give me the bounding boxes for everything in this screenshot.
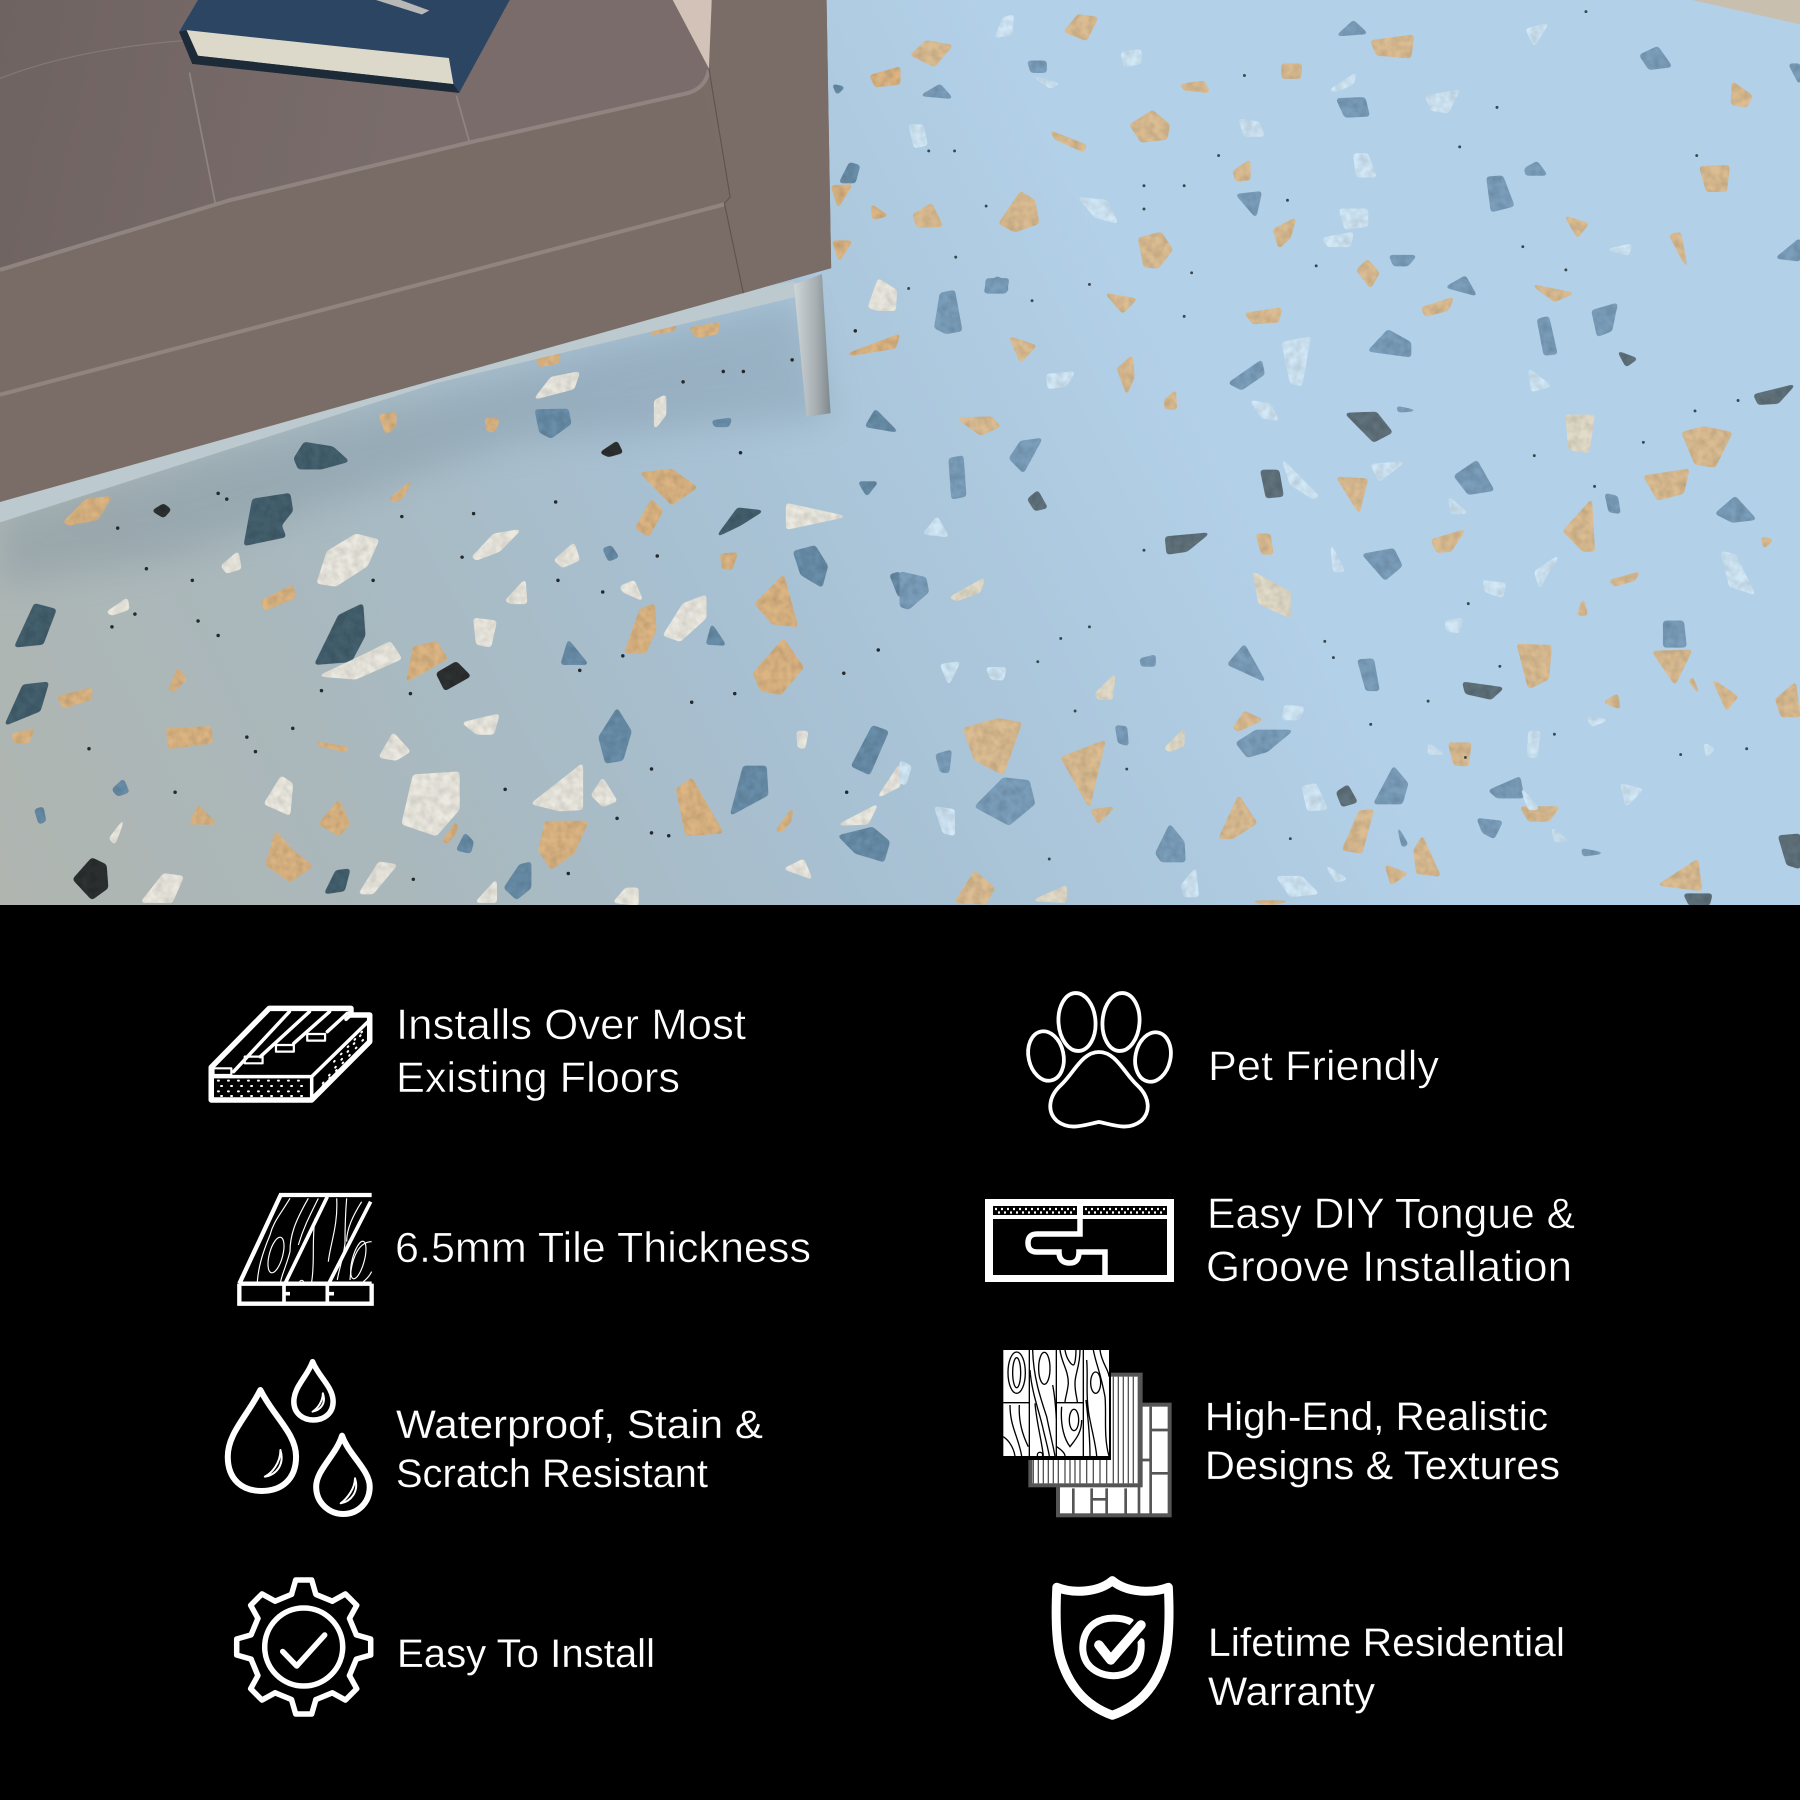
terrazzo chips: right floor xyxy=(900,0,1800,905)
sofa lower front xyxy=(0,0,831,502)
feature: lifetime residential warranty xyxy=(1056,1581,1565,1715)
black features panel xyxy=(0,905,1800,1800)
label xyxy=(396,1403,763,1496)
book xyxy=(179,0,510,93)
terrazzo chips: left floor xyxy=(0,67,900,905)
sofa cushion piping xyxy=(0,70,729,395)
icon: tongue and groove joint xyxy=(985,1199,1174,1282)
sofa leg xyxy=(794,274,831,417)
label xyxy=(1208,1621,1565,1714)
icon: paw print xyxy=(1024,992,1175,1127)
feature: tongue and groove installation xyxy=(985,1190,1575,1291)
label: 6.5mm Tile Thickness xyxy=(395,1224,811,1272)
feature: waterproof, stain and scratch resistant xyxy=(228,1362,763,1514)
label: Groove Installation xyxy=(1206,1243,1572,1291)
pen xyxy=(376,0,429,15)
label: Existing Floors xyxy=(396,1054,680,1102)
label xyxy=(396,1001,746,1102)
label: Scratch Resistant xyxy=(396,1452,708,1496)
icon: water drops xyxy=(228,1362,370,1514)
icon: shield with check xyxy=(1056,1581,1169,1715)
sofa seat seam xyxy=(0,41,184,78)
sofa cushion front xyxy=(0,87,730,395)
label: Designs & Textures xyxy=(1205,1444,1560,1488)
label: Warranty xyxy=(1208,1670,1375,1714)
label xyxy=(1205,1395,1560,1488)
icon: wood plank cross section xyxy=(239,1195,372,1304)
sofa arm seam xyxy=(709,68,743,293)
photo: terrazzo floor with sofa xyxy=(0,0,1800,905)
feature: pet friendly xyxy=(1024,992,1439,1127)
label: Easy To Install xyxy=(397,1632,655,1676)
icon: gear with check xyxy=(236,1579,371,1715)
feature: installs over most existing floors xyxy=(211,1001,746,1102)
label xyxy=(1206,1190,1575,1291)
label: Installs Over Most xyxy=(396,1001,746,1049)
icon: floor layers xyxy=(211,1008,370,1100)
front tile with wood grain xyxy=(1002,1349,1111,1460)
label: Waterproof, Stain & xyxy=(396,1403,763,1447)
label: High-End, Realistic xyxy=(1205,1395,1548,1439)
icon: stacked tile textures xyxy=(1002,1349,1170,1515)
sofa xyxy=(0,0,831,522)
label: Easy DIY Tongue & xyxy=(1207,1190,1575,1238)
sofa chrome base rail xyxy=(0,281,795,522)
feature: tile thickness xyxy=(239,1195,811,1304)
middle tile xyxy=(1030,1375,1141,1485)
sofa arm xyxy=(709,0,831,293)
sofa seat top xyxy=(0,0,124,268)
label: Pet Friendly xyxy=(1208,1042,1439,1089)
feature: high-end realistic designs and textures xyxy=(1002,1349,1560,1515)
sofa inner arm highlight xyxy=(673,0,715,68)
back tile xyxy=(1058,1405,1170,1515)
feature: easy to install xyxy=(236,1579,655,1715)
label: Lifetime Residential xyxy=(1208,1621,1565,1665)
sofa seam lines xyxy=(189,73,470,203)
